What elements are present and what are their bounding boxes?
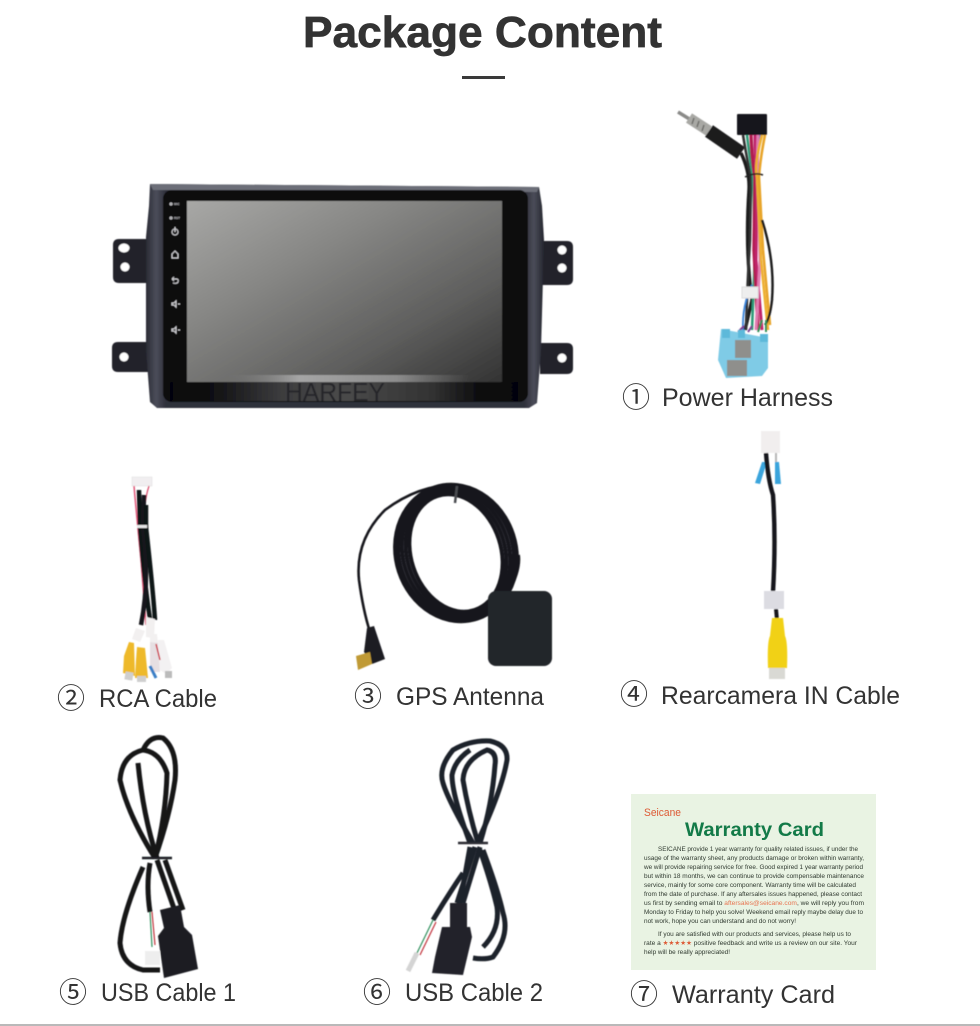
label: power harness: Power Harness	[662, 384, 833, 412]
card body: not work, hope you can understand and do not worry!	[644, 918, 796, 925]
label: GPS antenna	[354, 681, 544, 712]
product: head unit: MIC	[174, 202, 180, 206]
label: USB cable 2	[363, 977, 543, 1008]
label: power harness: ①	[622, 382, 650, 413]
product: USB cable 2	[408, 741, 507, 975]
product: GPS antenna	[356, 469, 552, 670]
cable coil	[378, 469, 534, 637]
left mounting brackets	[112, 239, 148, 372]
antenna puck	[488, 591, 552, 666]
card body: from the date of purchase. If any aftersales issues happened, please contact	[644, 891, 862, 898]
product: power harness	[678, 112, 773, 378]
label: warranty card: ⑦	[630, 979, 658, 1010]
product: USB cable 1	[120, 738, 198, 978]
title underline	[462, 76, 505, 79]
label: USB cable 1	[59, 977, 236, 1008]
card body: we will provide repairing service for free. Good expired 1 year warranty period	[643, 864, 863, 871]
label: RCA cable: RCA Cable	[99, 685, 217, 713]
white and red RCA plugs	[150, 642, 160, 672]
label tag	[764, 591, 784, 609]
black wire	[766, 453, 774, 592]
white connector	[132, 477, 152, 486]
product: rearcamera in cable	[755, 431, 787, 679]
yellow RCA plugs	[123, 642, 135, 676]
bezel	[163, 190, 528, 402]
card body: but within 18 months, we can continue to provide compensable maintenance	[644, 873, 864, 880]
card body: rate a ★★★★★ positive feedback and write us a review on our site. Your	[644, 939, 858, 947]
brand: HARFEY	[285, 377, 385, 407]
lead cable	[359, 485, 457, 632]
label: GPS antenna: ③	[354, 681, 382, 712]
wire tag	[742, 287, 758, 298]
label: USB cable 1: USB Cable 1	[101, 979, 236, 1007]
USB plug	[432, 903, 472, 975]
label: warranty card: Warranty Card	[672, 981, 835, 1009]
USB plug	[158, 905, 198, 978]
card body: Monday to Friday to help you solve! Weekend email reply maybe delay due to	[644, 909, 863, 916]
title: Package Content	[303, 8, 662, 57]
card body: help will be really appreciated!	[644, 949, 730, 956]
card heading: Warranty Card	[685, 820, 824, 841]
label: USB cable 2: ⑥	[363, 977, 391, 1008]
card body: SEICANE provide 1 year warranty for quality related issues, if under the	[658, 846, 858, 853]
frame	[146, 184, 544, 408]
card body: service, mainly for some core component. Warranty time will be calculated	[644, 882, 856, 889]
label: RCA cable	[57, 683, 217, 714]
card body: us first by sending email to aftersales@seicane.com, we will reply you from	[644, 900, 864, 907]
brand: Seicane	[644, 807, 681, 819]
label: rearcamera in cable: ④	[620, 679, 648, 710]
card body: If you are satisfied with our products and services, please help us to	[658, 931, 851, 938]
screen	[187, 201, 502, 382]
label: rearcamera in cable: Rearcamera IN Cable	[661, 682, 900, 710]
product: head unit: RST	[174, 216, 180, 220]
card background	[631, 794, 876, 970]
white connector	[761, 431, 780, 453]
SMA connector	[364, 626, 385, 664]
label: USB cable 2: USB Cable 2	[405, 979, 543, 1007]
card body: usage of the warranty sheet, any products damage or broken within warranty,	[644, 855, 864, 862]
card body	[643, 846, 864, 956]
blue connector	[718, 329, 768, 378]
right mounting brackets	[540, 241, 573, 374]
blue sleeves	[755, 462, 767, 484]
black connector	[737, 114, 767, 135]
product: head unit	[112, 184, 573, 408]
yellow plug	[768, 618, 787, 668]
label: GPS antenna: GPS Antenna	[396, 683, 544, 711]
plug sleeves	[132, 617, 158, 644]
warranty card	[631, 794, 876, 970]
wire bundle	[738, 135, 773, 332]
label: USB cable 1: ⑤	[59, 977, 87, 1008]
product: RCA cable	[123, 477, 172, 682]
label: RCA cable: ②	[57, 683, 85, 714]
side button icons	[170, 203, 180, 333]
antenna plug	[678, 112, 691, 120]
